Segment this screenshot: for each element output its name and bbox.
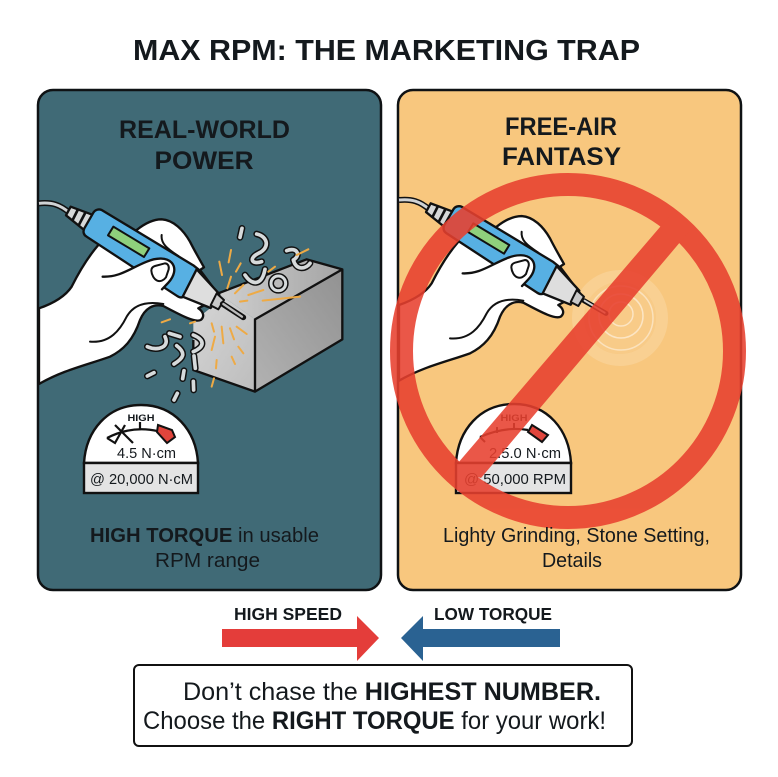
panel: real-world power bbox=[38, 90, 381, 590]
arrow: low torque bbox=[401, 616, 560, 661]
heading: real-world power bbox=[119, 116, 290, 175]
gauge: 2.5.0 N·cm bbox=[456, 404, 571, 493]
caption: high torque bbox=[90, 525, 319, 572]
label: high speed: HIGH SPEED bbox=[234, 604, 342, 624]
gauge: 2.5.0 N·cm: 2.5.0 N·cm bbox=[489, 446, 561, 462]
panel: free-air fantasy bbox=[398, 90, 741, 590]
caption: high torque: RPM range bbox=[155, 550, 260, 572]
icon: prohibition sign bbox=[402, 184, 734, 518]
gauge: 4.5 N·cm: @ 20,000 N·cM bbox=[90, 472, 193, 488]
bit bbox=[223, 304, 243, 317]
sparks bbox=[162, 249, 308, 387]
metal shavings bbox=[147, 228, 310, 400]
caption: high torque: HIGH TORQUE in usable bbox=[90, 525, 319, 547]
callout: Don’t chase the HIGHEST NUMBER. bbox=[183, 678, 601, 706]
ripples: free-air spin bbox=[578, 276, 662, 360]
stone block bbox=[193, 259, 342, 392]
illustration: hand with tool bbox=[399, 200, 606, 381]
gauge: 2.5.0 N·cm: @ 50,000 RPM bbox=[464, 472, 566, 488]
callout: Choose the RIGHT TORQUE for your work! bbox=[143, 707, 606, 735]
callout bbox=[134, 665, 632, 746]
heading: real-world power: POWER bbox=[154, 147, 254, 175]
arrow: high speed bbox=[222, 616, 379, 661]
gauge: 4.5 N·cm: 4.5 N·cm bbox=[117, 446, 176, 462]
caption: light grinding bbox=[443, 525, 710, 572]
panel background bbox=[38, 90, 381, 590]
label: low torque: LOW TORQUE bbox=[434, 604, 552, 624]
gauge: 4.5 N·cm: HIGH bbox=[128, 413, 155, 424]
caption: light grinding: Lighty Grinding, Stone Setting, bbox=[443, 525, 710, 547]
illustration: rotary tool cutting a block bbox=[39, 203, 342, 400]
hand holding tool bbox=[39, 203, 224, 384]
title: MAX RPM: THE MARKETING TRAP bbox=[133, 35, 640, 67]
heading: free-air fantasy: FANTASY bbox=[502, 143, 621, 171]
bit bbox=[584, 301, 606, 313]
panel background bbox=[398, 90, 741, 590]
heading: real-world power: REAL-WORLD bbox=[119, 116, 290, 144]
caption: light grinding: Details bbox=[542, 550, 602, 572]
gauge: 4.5 N·cm bbox=[84, 405, 198, 493]
heading: free-air fantasy: FREE-AIR bbox=[505, 113, 617, 141]
gauge: 2.5.0 N·cm: HIGH bbox=[500, 413, 528, 424]
heading: free-air fantasy bbox=[502, 113, 621, 171]
